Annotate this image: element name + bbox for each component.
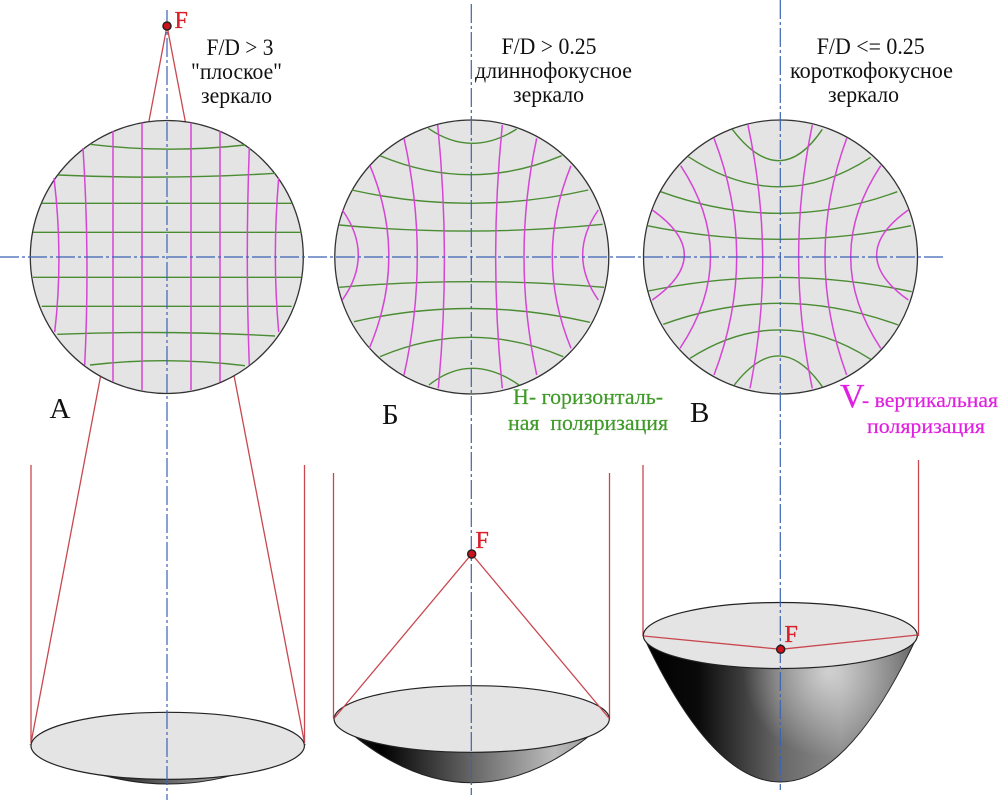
- circle A: flat mirror field lines: [30, 120, 303, 394]
- heading B: [475, 34, 632, 107]
- heading C: зеркало: [828, 82, 899, 107]
- legend: vertical polarization: V: [840, 378, 865, 415]
- letter B: Б: [382, 399, 399, 431]
- letter C: В: [690, 397, 709, 429]
- heading C: F/D <= 0.25: [817, 34, 925, 59]
- heading A: F/D > 3: [206, 35, 274, 60]
- legend: vertical polarization: - вертикальная: [862, 388, 998, 412]
- heading A: "плоское": [191, 59, 282, 84]
- legend: vertical polarization: [840, 378, 998, 438]
- circle B: long-focus mirror field lines: [335, 120, 609, 394]
- heading B: F/D > 0.25: [502, 34, 596, 59]
- heading A: [191, 35, 282, 108]
- dish A: flat mirror: [31, 712, 304, 784]
- panel A: flat mirror rays: [31, 26, 304, 743]
- legend: horizontal polarization: [508, 384, 668, 435]
- focus point A: F: [174, 8, 188, 34]
- dish C: short-focus mirror: [643, 602, 918, 782]
- panel B: long-focus mirror rays: [334, 473, 610, 718]
- heading C: короткофокусное: [790, 58, 953, 83]
- letter A: А: [50, 393, 70, 425]
- focus point A: [163, 8, 188, 34]
- focus point B: F: [476, 528, 489, 554]
- dish B: long-focus mirror: [334, 554, 609, 783]
- panel C: short-focus mirror rays: [643, 460, 918, 636]
- heading B: длиннофокусное: [475, 58, 632, 83]
- heading A: зеркало: [201, 83, 272, 108]
- legend: horizontal polarization: Н- горизонталь-: [513, 384, 663, 409]
- legend: horizontal polarization: ная поляризация: [508, 410, 668, 435]
- focus point B: [468, 528, 489, 558]
- heading B: зеркало: [513, 82, 584, 107]
- focus point C: F: [784, 622, 798, 648]
- heading C: [790, 34, 953, 107]
- focus point C: [777, 622, 798, 653]
- legend: vertical polarization: поляризация: [867, 414, 985, 438]
- circle C: short-focus mirror field lines: [644, 120, 918, 394]
